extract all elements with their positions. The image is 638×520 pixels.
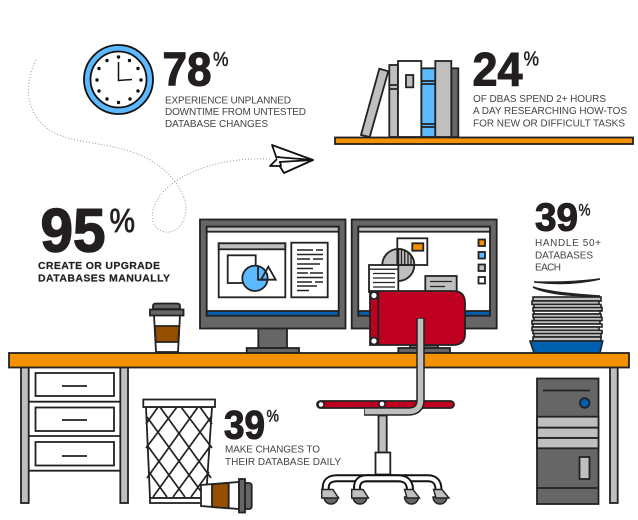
stat: 24% — [472, 42, 627, 130]
stat: 78% — [162, 42, 306, 130]
stat: 24%: 24 — [472, 42, 522, 96]
chair stem — [376, 416, 390, 474]
stat: 78%: % — [213, 49, 229, 71]
stat: 24%: A DAY RESEARCHING HOW-TOS — [473, 106, 627, 117]
icon: coffee cup — [150, 304, 184, 352]
computer tower — [537, 378, 598, 504]
text window — [369, 265, 398, 292]
pie chart — [382, 249, 414, 281]
stat: 95%: CREATE OR UPGRADE — [38, 260, 160, 272]
stat: 39% databases: HANDLE 50+ — [535, 238, 601, 249]
stat: 78%: DATABASE CHANGES — [165, 119, 268, 130]
icon: fallen coffee cup — [201, 479, 252, 512]
legend squares — [478, 240, 485, 284]
stat: 95%: DATABASES MANUALLY — [38, 273, 170, 285]
icon: books on shelf — [335, 61, 633, 144]
icon: clock — [84, 45, 153, 114]
stat: 39% daily: MAKE CHANGES TO — [225, 445, 320, 456]
chair seat — [317, 401, 454, 408]
stat: 39% databases: DATABASES — [535, 250, 593, 262]
window with shapes — [219, 243, 285, 297]
wastebasket — [143, 400, 215, 503]
gray box — [425, 276, 457, 294]
stat: 95%: % — [110, 202, 135, 239]
shelf — [335, 138, 633, 144]
stat: 39% databases: EACH — [535, 262, 561, 274]
stat: 78%: 78 — [162, 42, 212, 96]
stat: 24%: FOR NEW OR DIFFICULT TASKS — [473, 118, 625, 130]
chair back — [370, 291, 465, 345]
chart window — [397, 238, 427, 265]
stat: 95% — [38, 196, 170, 285]
stat: 39% databases: 39 — [535, 197, 578, 240]
stat: 39% daily: % — [266, 406, 279, 426]
stat: 95%: 95 — [40, 196, 106, 264]
chair post — [364, 318, 420, 412]
stat: 78%: EXPERIENCE UNPLANNED — [165, 96, 291, 106]
stat: 78%: DOWNTIME FROM UNTESTED — [165, 107, 306, 118]
icon: paper plane — [270, 145, 313, 173]
desk drawers — [29, 373, 120, 471]
chair casters — [322, 490, 449, 504]
stat: 39% daily: THEIR DATABASE DAILY — [225, 457, 341, 468]
right monitor — [352, 220, 497, 353]
stat: 39% daily — [224, 403, 341, 468]
stat: 24%: OF DBAS SPEND 2+ HOURS — [473, 94, 606, 105]
document window — [291, 243, 328, 297]
stat: 39% databases — [535, 197, 601, 274]
office chair — [317, 291, 465, 504]
stat: 39% daily: 39 — [224, 403, 265, 447]
stat: 39% databases: % — [578, 200, 590, 220]
desk — [9, 353, 629, 503]
stat: 24%: % — [524, 48, 539, 70]
chair base — [326, 478, 438, 490]
left monitor — [200, 220, 346, 353]
icon: stack of plates — [530, 279, 603, 353]
dotted flight path — [28, 60, 270, 232]
